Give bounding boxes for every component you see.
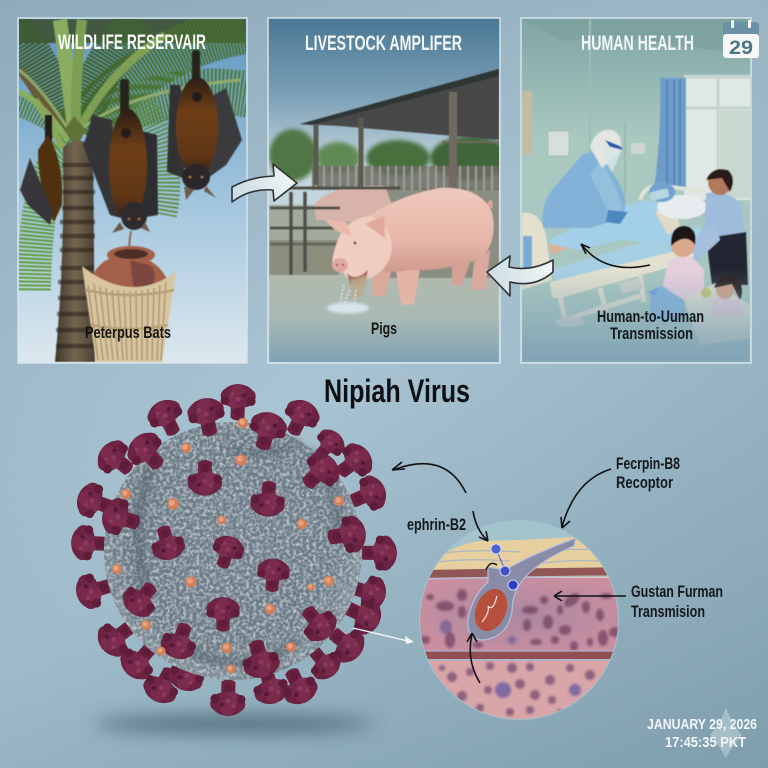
arrow: ephrin-B2 to cell — [473, 511, 488, 541]
icon: calendar date: 29 — [729, 38, 753, 59]
receptor markers — [486, 544, 518, 590]
timestamp: 17:45:35 PKT — [665, 734, 746, 751]
follicle red bulb — [474, 588, 508, 632]
icon: bat right — [167, 50, 242, 200]
crib with small child — [684, 276, 750, 345]
watermark diamond — [710, 708, 742, 758]
palm fronds — [0, 19, 250, 292]
hospital bed — [522, 186, 706, 327]
arrow: bats to pigs — [232, 164, 297, 202]
icon: calendar date — [723, 20, 759, 59]
label: receptor — [616, 454, 680, 492]
surface protein dots — [112, 418, 344, 674]
surface shading — [139, 440, 337, 663]
icon: bat centre — [83, 79, 158, 233]
label: receptor: Recoptor — [616, 473, 673, 492]
arrow: ephrin-B2 to virus — [392, 462, 466, 493]
tissue cells — [420, 589, 621, 651]
arrow: virus to detail circle — [353, 628, 414, 644]
icon: sap drip, clay jar and basket — [82, 231, 176, 362]
title: Nipiah Virus — [324, 373, 470, 409]
heading: wildlife reservair: WILDLIFE RESERVAIR — [58, 31, 206, 54]
panel: human health — [521, 18, 752, 363]
spilled feed — [327, 275, 369, 314]
icon: bat left — [20, 115, 62, 225]
label: human-to-human transmission: Transmission — [610, 324, 693, 343]
pink tissue — [415, 578, 625, 654]
big pig — [325, 188, 494, 305]
virus ground shadow — [93, 715, 373, 733]
panel: livestock amplifier — [268, 18, 510, 363]
surface spikes front — [98, 395, 368, 682]
background pig — [314, 186, 398, 222]
heading: human health: HUMAN HEALTH — [581, 32, 694, 55]
child — [647, 226, 704, 320]
label: pigs: Pigs — [371, 319, 397, 338]
label: human-to-human transmission — [597, 307, 704, 343]
lower cell layer — [428, 660, 610, 719]
virus sphere — [104, 422, 362, 680]
fat layer — [430, 537, 608, 578]
arrow: bedside curve — [581, 244, 650, 268]
timestamp — [647, 716, 757, 751]
label: peterpus bats: Peterpus Bats — [85, 323, 171, 342]
patient under blanket — [548, 182, 707, 255]
label: gustan furman transmission: Gustan Furman — [631, 582, 723, 601]
label: receptor: Fecrpin-B8 — [616, 454, 680, 473]
woman caregiver — [692, 169, 748, 285]
label: gustan furman transmission: Transmision — [631, 602, 705, 621]
rim spikes behind — [70, 383, 397, 717]
hair follicle duct — [468, 538, 576, 640]
curtain — [654, 78, 686, 190]
fence rails — [270, 188, 400, 275]
label: gustan furman transmission — [631, 582, 723, 621]
heading: livestock amplifer: LIVESTOCK AMPLIFER — [305, 32, 462, 55]
window — [684, 75, 752, 200]
dark tissue bands — [430, 567, 608, 578]
arrow: follicle base — [467, 633, 480, 683]
barn roof — [300, 69, 499, 190]
palm trunk — [55, 140, 96, 362]
panel: cell detail circle — [419, 520, 619, 720]
farm scene — [269, 69, 510, 363]
wall chart items — [522, 91, 532, 154]
arrow: transmission to tissue — [554, 591, 626, 601]
arrow: pigs to humans — [487, 256, 553, 296]
virus illustration — [70, 383, 397, 717]
doctor in protective suit — [542, 130, 628, 228]
arrow: receptor to cell — [561, 469, 611, 528]
hospital scene — [522, 19, 752, 362]
panel: wildlife reservoir — [0, 18, 250, 363]
label: human-to-human transmission: Human-to-Uuman — [597, 307, 704, 326]
label: ephrin-B2: ephrin-B2 — [407, 515, 466, 534]
